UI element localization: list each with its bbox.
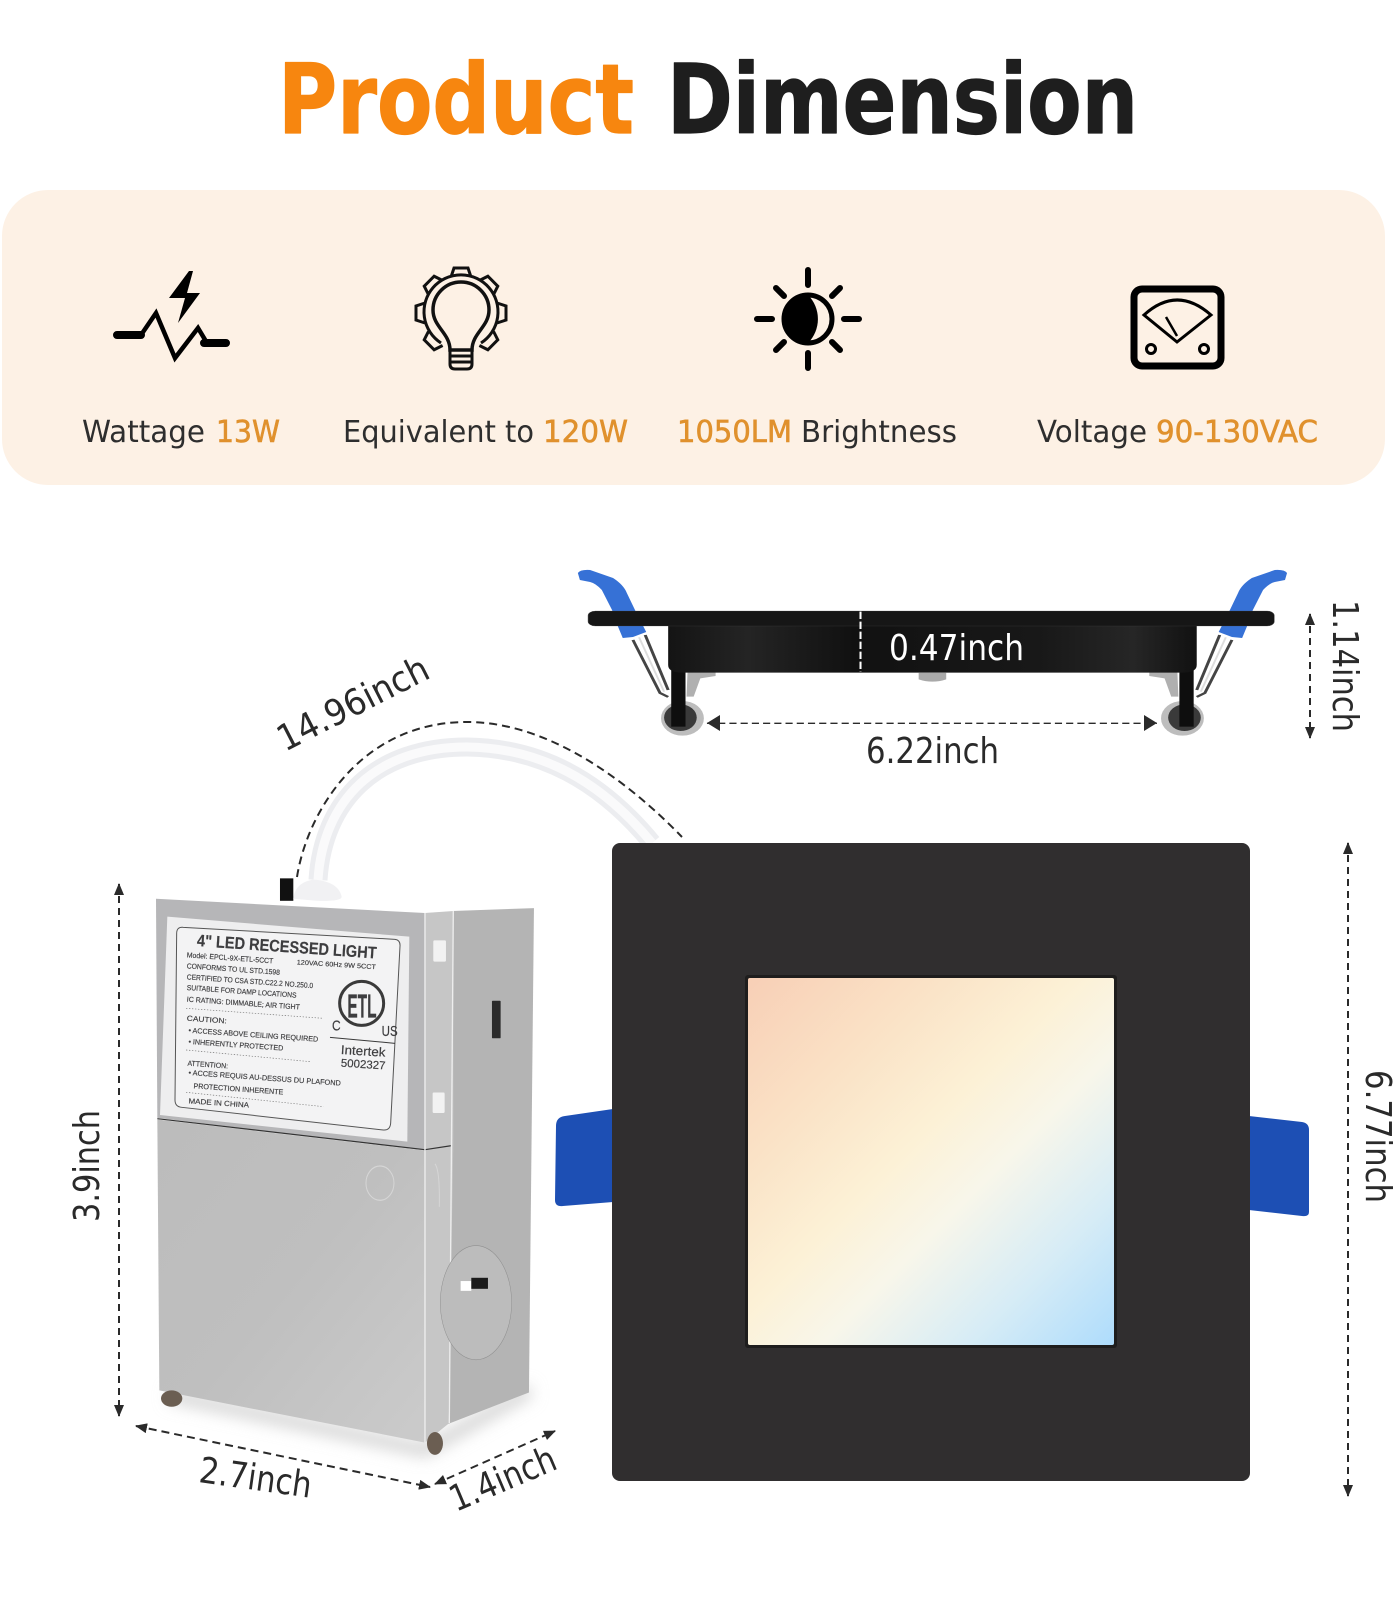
flange height marker xyxy=(859,612,863,672)
ETL certification mark: 5002327 xyxy=(340,1058,386,1072)
label text: CONFORMS TO UL STD.1598 xyxy=(187,961,280,977)
label text: ATTENTION: xyxy=(187,1059,228,1070)
product label xyxy=(160,917,409,1142)
tabs xyxy=(433,940,446,1113)
right spring clip xyxy=(1149,570,1287,736)
label text: • ACCESS ABOVE CEILING REQUIRED xyxy=(188,1026,318,1044)
label: 1.14 inch: 1.14inch xyxy=(1324,600,1365,732)
junction box xyxy=(156,878,534,1455)
corner edge xyxy=(425,911,453,1443)
ETL certification mark: ETL xyxy=(347,988,377,1025)
label: 6.22 inch: 6.22inch xyxy=(866,731,999,772)
light panel xyxy=(748,978,1114,1345)
window frame xyxy=(745,975,1117,1348)
junction box shadow xyxy=(170,1390,530,1450)
text: voltage: Voltage xyxy=(1037,415,1147,450)
left blue clip xyxy=(555,1109,613,1206)
label text: IC RATING: DIMMABLE; AIR TIGHT xyxy=(187,995,301,1012)
cable xyxy=(318,747,652,880)
label text: SUITABLE FOR DAMP LOCATIONS xyxy=(187,983,297,1000)
icon: voltage gauge xyxy=(1134,289,1221,366)
dashed arc: cable length xyxy=(297,722,682,877)
open mark xyxy=(366,1164,439,1207)
ETL certification mark xyxy=(330,981,398,1072)
side face xyxy=(448,908,534,1424)
label text: 120VAC 60Hz 9W 5CCT xyxy=(297,959,376,971)
screw right xyxy=(427,1432,443,1455)
text: voltage: 90-130VAC xyxy=(1156,415,1318,450)
text: equivalent: Equivalent to xyxy=(343,415,534,450)
connector xyxy=(280,878,342,901)
text: wattage: 13W xyxy=(216,415,280,450)
title xyxy=(278,44,1138,156)
label text: 4" LED RECESSED LIGHT xyxy=(196,931,377,963)
title: Product xyxy=(278,44,634,156)
knockout slot xyxy=(461,1278,488,1291)
dimension width arrow xyxy=(707,721,1157,725)
arrowheads: 6.22 inch xyxy=(707,715,1157,731)
center screw xyxy=(919,673,946,682)
lower front face xyxy=(157,1119,425,1443)
arrow: box depth xyxy=(435,1431,555,1484)
icon: brightness sun xyxy=(757,270,859,368)
left spring clip xyxy=(578,570,716,736)
label text: CAUTION: xyxy=(187,1014,227,1025)
screw left xyxy=(161,1390,182,1407)
icon: gear light bulb xyxy=(416,268,506,369)
text: wattage xyxy=(82,415,280,450)
arrow: box width xyxy=(136,1426,430,1487)
text: brightness: Brightness xyxy=(801,415,957,450)
text: brightness: 1050LM xyxy=(677,415,792,450)
label text: MADE IN CHINA xyxy=(188,1096,249,1110)
text: brightness xyxy=(677,415,957,450)
label text: • INHERENTLY PROTECTED xyxy=(188,1037,284,1053)
right blue clip xyxy=(1249,1116,1309,1216)
label: 1.4 inch: 1.4inch xyxy=(443,1439,563,1520)
text: equivalent xyxy=(343,415,628,450)
label text xyxy=(187,931,377,1110)
label text: • ACCES REQUIS AU-DESSUS DU PLAFOND xyxy=(188,1068,341,1088)
title: Dimension xyxy=(667,44,1138,156)
label: 2.7 inch: 2.7inch xyxy=(197,1450,314,1507)
panel: specification strip xyxy=(2,190,1385,485)
seam xyxy=(157,1119,452,1150)
label: 14.96 inch: 14.96inch xyxy=(270,649,436,760)
side slot xyxy=(492,1001,501,1038)
ETL certification mark: Intertek xyxy=(340,1043,387,1060)
knockout plate xyxy=(440,1246,512,1360)
ETL certification mark: US xyxy=(382,1024,398,1040)
arrow: 6.77 inch xyxy=(1347,843,1349,1496)
front view of recessed light xyxy=(555,843,1309,1481)
upper front face xyxy=(156,899,425,1150)
label: 3.9 inch: 3.9inch xyxy=(67,1110,108,1222)
label: 0.47 inch: 0.47inch xyxy=(889,628,1024,669)
icon: wattage bolt and pulse xyxy=(117,271,226,358)
text: wattage: Wattage xyxy=(82,415,205,450)
ETL certification mark: C xyxy=(332,1019,341,1035)
text: voltage xyxy=(1037,415,1318,450)
flange xyxy=(588,611,1274,626)
label text: CERTIFIED TO CSA STD.C22.2 NO.250.0 xyxy=(187,972,313,990)
text: equivalent: 120W xyxy=(543,415,628,450)
side strip xyxy=(425,911,453,1443)
housing xyxy=(668,625,1197,673)
label text: Model: EPCL-9X-ETL-5CCT xyxy=(187,950,274,965)
label text: PROTECTION INHERENTE xyxy=(193,1081,284,1097)
label dotted separators xyxy=(186,1008,323,1107)
arrow: 1.14 inch xyxy=(1309,614,1311,738)
square trim xyxy=(612,843,1250,1481)
arrow: box height xyxy=(118,884,120,1416)
side view of recessed light xyxy=(578,570,1287,736)
